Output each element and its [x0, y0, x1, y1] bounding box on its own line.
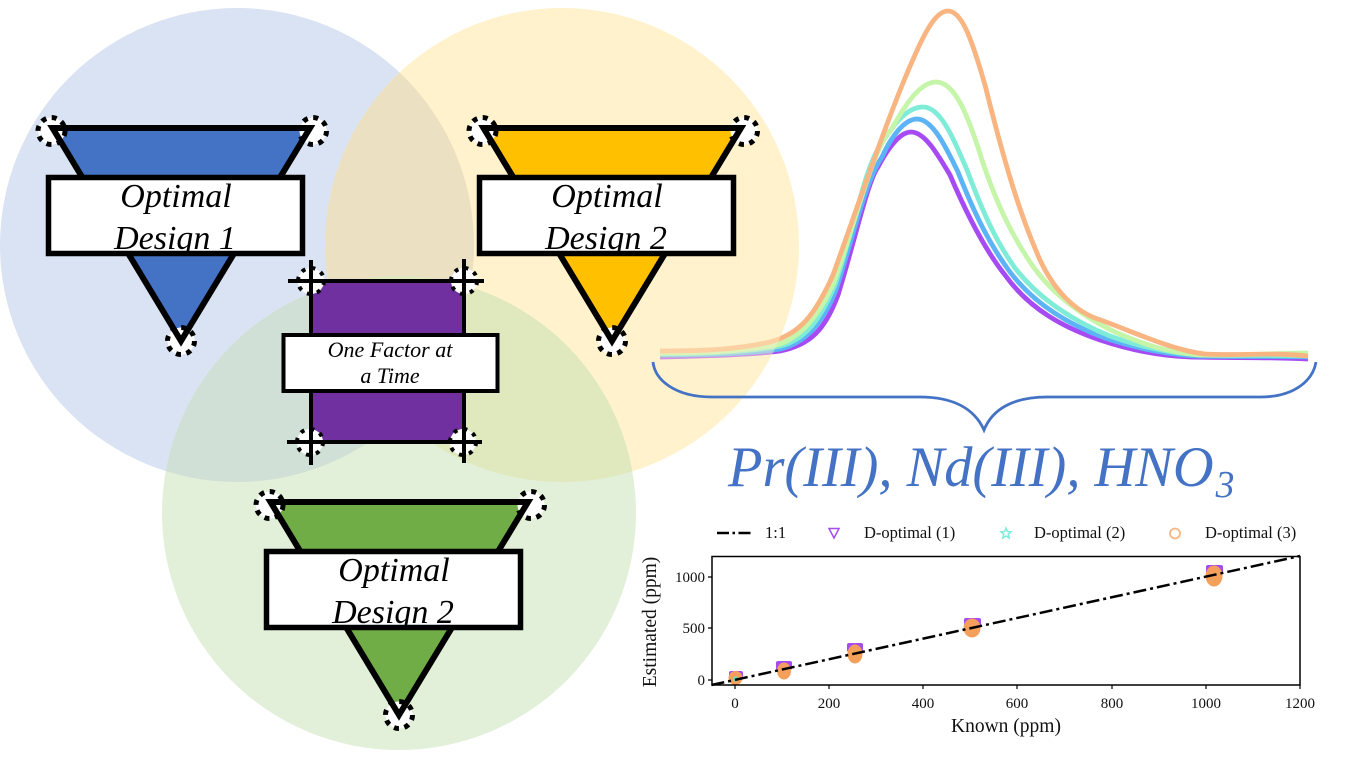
chart: overlaid spectra curves — [660, 8, 1308, 362]
panel: optimal design 2 (green): Design 2 — [331, 594, 454, 631]
1:1 line — [712, 556, 1300, 685]
heading: analytes: 3 — [1215, 464, 1234, 506]
panel: one factor at a time — [284, 259, 498, 465]
heading: analytes: Pr(III), Nd(III), HNO — [728, 436, 1214, 499]
tick labels — [731, 696, 1315, 712]
tick labels: 800 — [1101, 696, 1123, 712]
tick labels: 600 — [1006, 696, 1028, 712]
chart: known vs estimated scatter — [640, 556, 1315, 737]
panel: optimal design 1 — [38, 118, 326, 354]
y axis label: Estimated (ppm) — [640, 557, 661, 687]
panel: one factor at a time: One Factor at — [328, 337, 453, 362]
legend: D-optimal (3) — [1205, 523, 1296, 542]
panel: optimal design 1: Design 1 — [113, 220, 236, 257]
tick labels: 1200 — [1285, 696, 1315, 712]
data clusters — [728, 565, 1223, 685]
panel: optimal design 2 (green): Optimal — [338, 552, 450, 589]
panel: three overlapping circles — [0, 8, 799, 750]
axes — [712, 556, 1300, 685]
legend: 1:1 — [765, 523, 786, 542]
panel: optimal design 2 (yellow): Design 2 — [544, 220, 667, 257]
panel: optimal design 1: Optimal — [120, 178, 232, 215]
x axis label: Known (ppm) — [951, 716, 1061, 737]
chart: known vs estimated scatter: 500 — [682, 621, 705, 637]
tick labels: 400 — [912, 696, 934, 712]
legend — [717, 523, 1296, 542]
chart: known vs estimated scatter: 0 — [698, 673, 705, 689]
tick labels: 1000 — [1191, 696, 1221, 712]
panel: optimal design 2 (yellow): Optimal — [551, 178, 663, 215]
panel: one factor at a time: a Time — [360, 363, 420, 388]
panel: optimal design 2 (green) — [256, 492, 544, 728]
tick labels: 0 — [731, 696, 739, 712]
panel: optimal design 2 (yellow) — [469, 118, 758, 354]
chart: known vs estimated scatter: 1000 — [675, 570, 705, 586]
legend: D-optimal (1) — [864, 523, 955, 542]
legend: D-optimal (2) — [1034, 523, 1125, 542]
brace under spectra — [653, 362, 1316, 430]
tick labels: 200 — [818, 696, 840, 712]
